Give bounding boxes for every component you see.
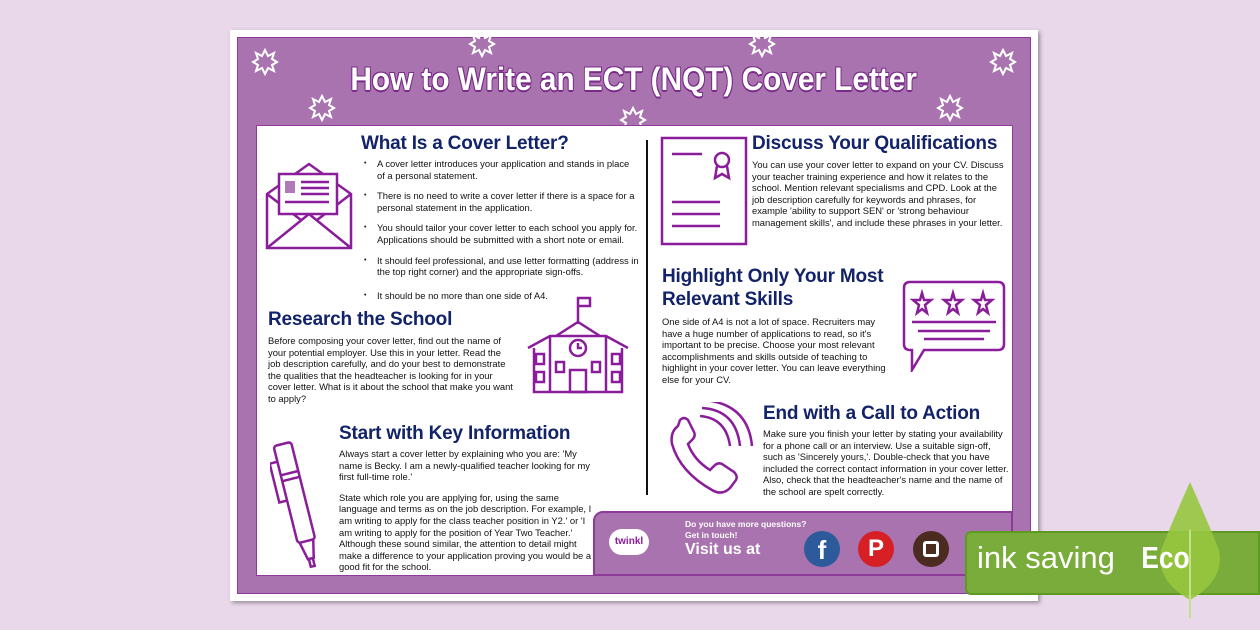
contact text: Get in touch!: [685, 530, 737, 540]
panel: start with key information: [270, 423, 592, 572]
icon: instagram: [913, 531, 949, 567]
contact text: Visit us at: [685, 541, 760, 558]
text: Eco: [1142, 540, 1190, 575]
panel: highlight skills: [662, 266, 1006, 385]
icon: facebook: [804, 531, 840, 567]
heading: End with a Call to Action: [763, 403, 980, 424]
icon: certificate: [660, 136, 748, 246]
bullet list: There is no need to write a cover letter if there is a space for a personal statement in the application.: [377, 190, 634, 213]
icon: pen: [270, 441, 316, 568]
divider: [646, 140, 648, 495]
poster frame: [230, 30, 1038, 601]
panel: discuss your qualifications: [660, 133, 1004, 246]
panel: what is a cover letter: [266, 133, 639, 301]
panel: research the school: [268, 296, 628, 404]
bullet list: It should feel professional, and use letter formatting (address in the top right corner) and the appropriate sign-offs.: [377, 255, 639, 277]
paragraph: [339, 448, 592, 572]
icon: pinterest: [858, 531, 894, 567]
heading: Discuss Your Qualifications: [752, 133, 997, 154]
eco badge: [965, 482, 1260, 618]
footer bar: [593, 511, 1013, 576]
heading: [662, 266, 884, 310]
heading: What Is a Cover Letter?: [361, 133, 569, 154]
contact text: [685, 519, 806, 558]
text: [977, 540, 1190, 575]
icon: phone: [670, 402, 754, 494]
heading: Start with Key Information: [339, 423, 570, 444]
icon: speech bubble with stars: [902, 280, 1006, 372]
title: How to Write an ECT (NQT) Cover Letter: [351, 61, 917, 97]
icon: pinterest: P: [868, 535, 884, 562]
icon: leaf: [1160, 482, 1220, 618]
paragraph: Make sure you finish your letter by stating your availability for a phone call or an interview. Use a suitable sign-off, such as 'Sincerely yours,'. Double-check that you have included the correct contact information in your cover letter. Also, check that the headteacher's name and the name of the school are spelt correctly.: [763, 428, 1008, 497]
bullet list: [364, 158, 639, 301]
white content panel: [256, 125, 1013, 576]
text: ink saving: [977, 540, 1115, 575]
paragraph: Always start a cover letter by explaining who you are: 'My name is Becky. I am a newly-qualified teacher looking for my first full-time role.': [339, 448, 590, 482]
paragraph: State which role you are applying for, using the same language and terms as on the job description. For example, I am writing to apply for the class teacher position in Y2.' or 'I am writing to apply for the position of Year Two Teacher.' Although these sound similar, the attention to detail might make a difference to your application proving you would be a good fit for the school.: [339, 492, 591, 572]
bullet list: It should be no more than one side of A4.: [377, 290, 548, 301]
contact text: Do you have more questions?: [685, 519, 806, 529]
panel: call to action: [670, 402, 1008, 497]
paragraph: Before composing your cover letter, find out the name of your potential employer. Use this in your letter. Read the job description carefully, and do your best to demonstrate the qualities that the headteacher is looking for in your cover letter. What is it about the school that make you want to apply?: [268, 335, 513, 404]
banner: [965, 531, 1260, 595]
paragraph: One side of A4 is not a lot of space. Recruiters may have a huge number of applications to read, so it's important to be precise. Choose your most relevant accomplishments and skills outside of teaching to highlight in your cover letter. You can leave everything else for your CV.: [662, 316, 886, 385]
bullet list: You should tailor your cover letter to each school you apply for. Applications should be submitted with a short note or email.: [377, 222, 637, 245]
heading: Relevant Skills: [662, 289, 793, 310]
icon: school: [527, 296, 628, 394]
logo: twinkl cloud: twinkl: [615, 536, 643, 547]
paragraph: You can use your cover letter to expand on your CV. Discuss your teacher training experience and how it relates to the school. Mention relevant specialisms and CPD. Look at the job description carefully for keywords and phrases, for example 'ability to support SEN' or 'strong behaviour management skills', and include these phrases in your letter.: [752, 159, 1004, 228]
bullet list: A cover letter introduces your application and stands in place of a personal statement.: [377, 158, 629, 181]
icon: facebook: f: [818, 535, 826, 565]
heading: Highlight Only Your Most: [662, 266, 883, 287]
icon: envelope: [266, 162, 352, 250]
logo: twinkl cloud: [609, 529, 649, 555]
heading: Research the School: [268, 309, 452, 330]
